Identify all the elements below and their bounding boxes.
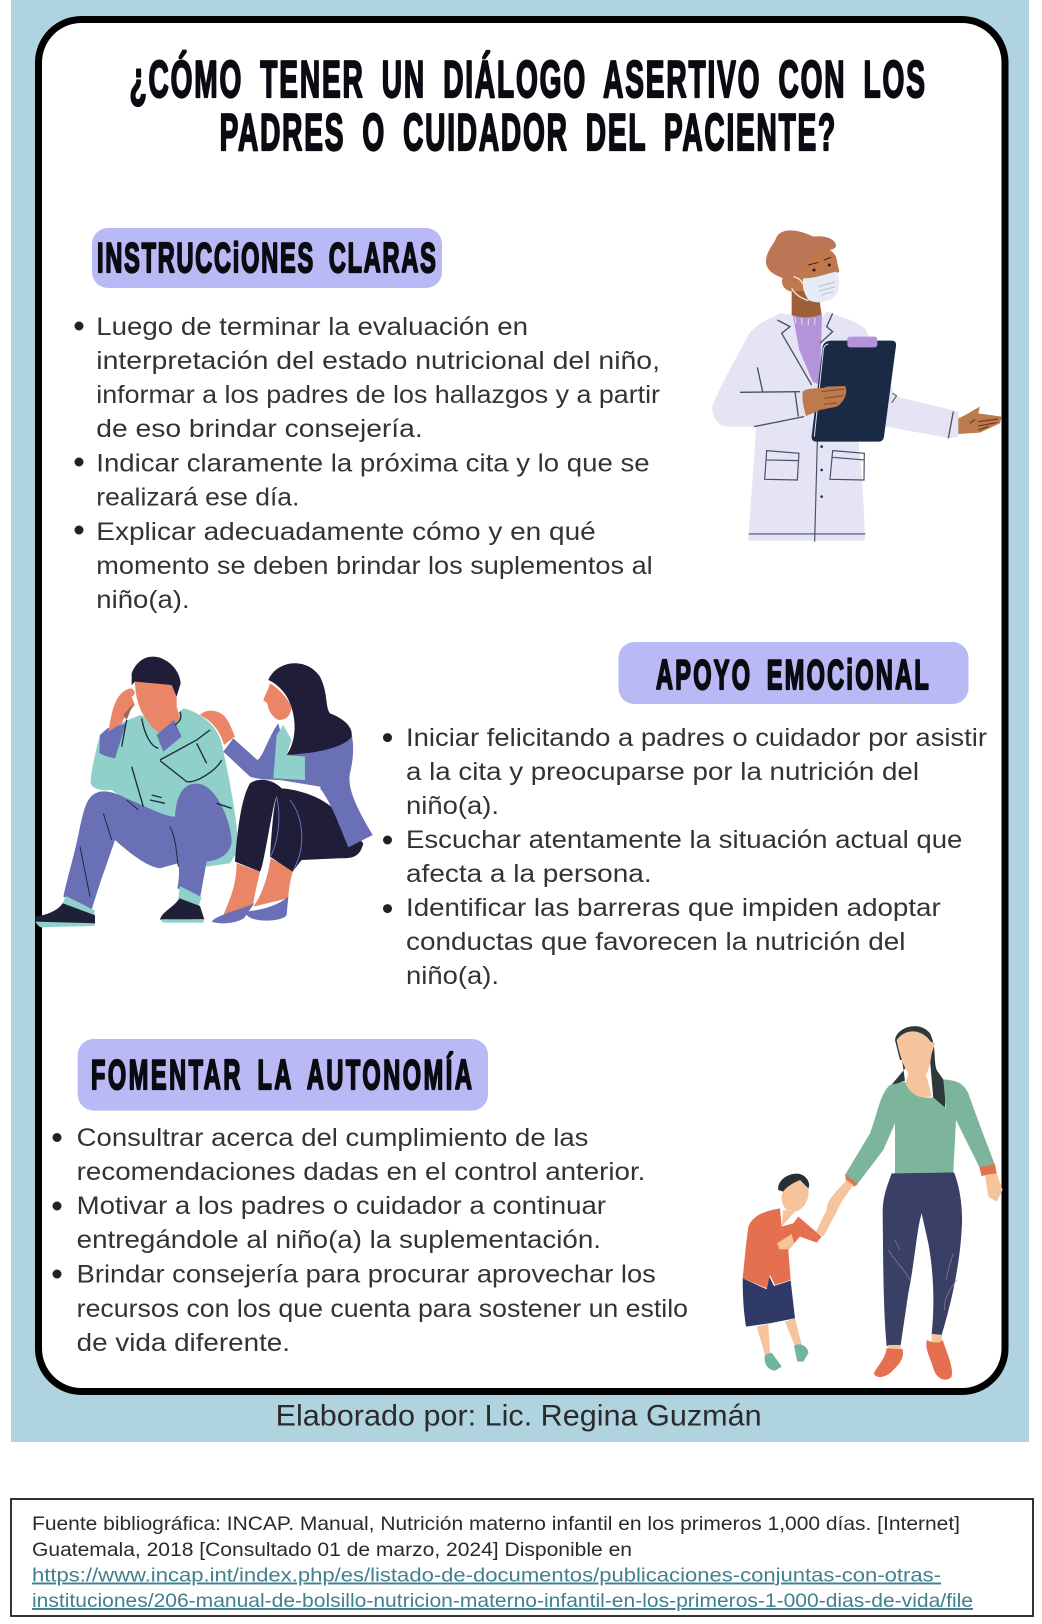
bullet list: instrucciones claras: realizará ese día. bbox=[96, 484, 299, 512]
title bbox=[130, 48, 925, 161]
bullet list: instrucciones claras: de eso brindar consejería. bbox=[96, 415, 423, 443]
bullet list: instrucciones claras bbox=[74, 313, 660, 614]
bullet list: instrucciones claras: momento se deben brindar los suplementos al bbox=[96, 552, 653, 580]
bullet list: apoyo emocional bbox=[383, 724, 987, 990]
title: ¿CÓMO TENER UN DIÁLOGO ASERTIVO CON LOS bbox=[130, 48, 925, 108]
bullet list: fomentar la autonomia bbox=[52, 1124, 688, 1357]
bullet list: apoyo emocional: Escuchar atentamente la situación actual que bbox=[406, 826, 962, 854]
panel: fomentar la autonomia bbox=[52, 1039, 688, 1357]
panel: apoyo emocional bbox=[383, 642, 987, 990]
bullet list: instrucciones claras: informar a los padres de los hallazgos y a partir bbox=[96, 381, 660, 409]
bullet list: instrucciones claras: interpretación del estado nutricional del niño, bbox=[96, 347, 660, 375]
source text: https://www.incap.int/index.php/es/listado-de-documentos/publicaciones-conjuntas-con-otras- bbox=[32, 1564, 941, 1586]
bullet list: apoyo emocional: niño(a). bbox=[406, 792, 499, 820]
heading pill: apoyo emocional bbox=[618, 642, 968, 704]
bullet list: apoyo emocional: Iniciar felicitando a padres o cuidador por asistir bbox=[406, 724, 987, 752]
source text: Guatemala, 2018 [Consultado 01 de marzo, 2024] Disponible en bbox=[32, 1539, 632, 1561]
heading pill: instrucciones claras: INSTRUCCiONES CLARAS bbox=[97, 235, 436, 282]
source text: instituciones/206-manual-de-bolsillo-nutricion-materno-infantil-en-los-primeros-1-000-dias-de-vida/file bbox=[32, 1590, 973, 1612]
bullet list: instrucciones claras: Explicar adecuadamente cómo y en qué bbox=[96, 518, 596, 546]
bullet list: fomentar la autonomia: Consultrar acerca del cumplimiento de las bbox=[77, 1124, 588, 1152]
bullet list: fomentar la autonomia: de vida diferente. bbox=[77, 1329, 290, 1357]
heading pill: fomentar la autonomia: FOMENTAR LA AUTONOMÍA bbox=[91, 1052, 472, 1099]
bullet list: instrucciones claras: Indicar claramente la próxima cita y lo que se bbox=[96, 449, 650, 477]
heading pill: fomentar la autonomia bbox=[78, 1039, 488, 1111]
bullet list: instrucciones claras: niño(a). bbox=[96, 586, 190, 614]
bullet list: apoyo emocional: afecta a la persona. bbox=[406, 860, 652, 888]
bullet list: apoyo emocional: conductas que favorecen la nutrición del bbox=[406, 928, 906, 956]
bullet list: fomentar la autonomia: entregándole al niño(a) la suplementación. bbox=[77, 1226, 601, 1254]
panel: instrucciones claras bbox=[74, 228, 660, 614]
title: PADRES O CUIDADOR DEL PACIENTE? bbox=[220, 103, 835, 161]
source box bbox=[11, 1499, 1033, 1616]
source text: Fuente bibliográfica: INCAP. Manual, Nutrición materno infantil en los primeros 1,000 días. [Internet] bbox=[32, 1513, 960, 1535]
illustration: sad man comforted by woman bbox=[35, 657, 373, 927]
footer credit: Elaborado por: Lic. Regina Guzmán bbox=[276, 1400, 762, 1432]
heading pill: apoyo emocional: APOYO EMOCiONAL bbox=[656, 652, 929, 699]
source text bbox=[32, 1513, 973, 1612]
bullet list: fomentar la autonomia: recomendaciones dadas en el control anterior. bbox=[77, 1158, 645, 1186]
bullet list: apoyo emocional: Identificar las barreras que impiden adoptar bbox=[406, 894, 941, 922]
illustration: mother holding child's hand bbox=[743, 1026, 1003, 1380]
bullet list: fomentar la autonomia: Motivar a los padres o cuidador a continuar bbox=[77, 1192, 606, 1220]
illustration: doctor with clipboard bbox=[712, 230, 1002, 542]
bullet list: fomentar la autonomia: Brindar consejería para procurar aprovechar los bbox=[77, 1261, 656, 1289]
bullet list: instrucciones claras: Luego de terminar la evaluación en bbox=[96, 313, 528, 341]
white rounded card with black border bbox=[38, 20, 1005, 1392]
bullet list: apoyo emocional: a la cita y preocuparse por la nutrición del bbox=[406, 758, 919, 786]
bullet list: apoyo emocional: niño(a). bbox=[406, 962, 499, 990]
bullet list: fomentar la autonomia: recursos con los que cuenta para sostener un estilo bbox=[77, 1295, 688, 1323]
